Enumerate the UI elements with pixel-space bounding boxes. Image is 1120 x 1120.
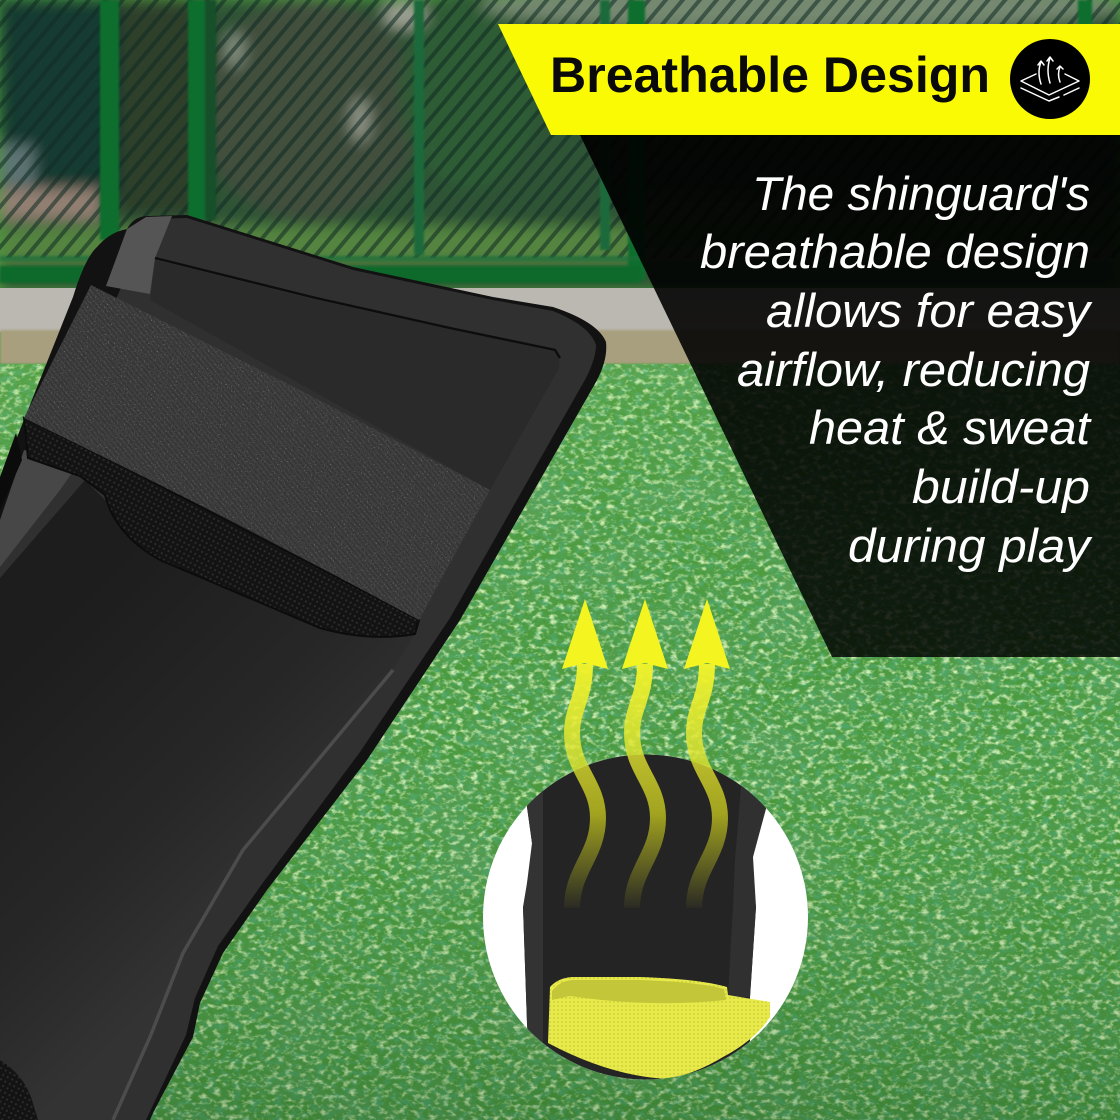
circular inset: shin guard back — [480, 750, 812, 1090]
arrow 3 — [684, 599, 730, 908]
inset guard body — [523, 750, 767, 1090]
icon: breathable layers — [1010, 39, 1090, 119]
main inner body — [0, 480, 415, 1120]
elastic strap — [20, 280, 495, 625]
fence backdrop — [0, 0, 1120, 290]
inner left light rim — [0, 450, 79, 567]
description text: during play — [848, 519, 1093, 572]
stitch line — [155, 258, 560, 358]
pavement — [0, 288, 1120, 332]
ankle mesh patch — [0, 1060, 38, 1120]
guard outer shell — [0, 215, 606, 1120]
heading: Breathable Design — [550, 47, 990, 103]
shin guard — [0, 215, 606, 1120]
description text: allows for easy — [766, 284, 1093, 337]
dry verge — [0, 330, 1120, 364]
foam edge — [106, 216, 172, 294]
mesh pocket — [24, 418, 419, 637]
description text — [700, 167, 1093, 572]
dark text panel — [580, 135, 1120, 657]
yellow title banner — [498, 24, 1120, 135]
inset guard left edge — [523, 790, 543, 1060]
inset guard right edge — [728, 775, 767, 997]
description text: The shinguard's — [752, 167, 1090, 220]
outer rim — [0, 218, 596, 1120]
fence posts and rail — [0, 0, 1092, 283]
seam highlight — [113, 670, 393, 1120]
chain link mesh — [0, 0, 1120, 258]
turf — [0, 364, 1120, 1120]
arrow 2 — [622, 599, 668, 908]
arrow 1 — [562, 599, 608, 908]
inner top pad — [150, 260, 559, 490]
description text: airflow, reducing — [737, 343, 1090, 396]
inset yellow strap — [548, 977, 770, 1079]
description text: breathable design — [700, 225, 1090, 278]
description text: build-up — [912, 460, 1090, 513]
description text: heat & sweat — [809, 401, 1092, 454]
airflow arrows — [562, 599, 730, 908]
